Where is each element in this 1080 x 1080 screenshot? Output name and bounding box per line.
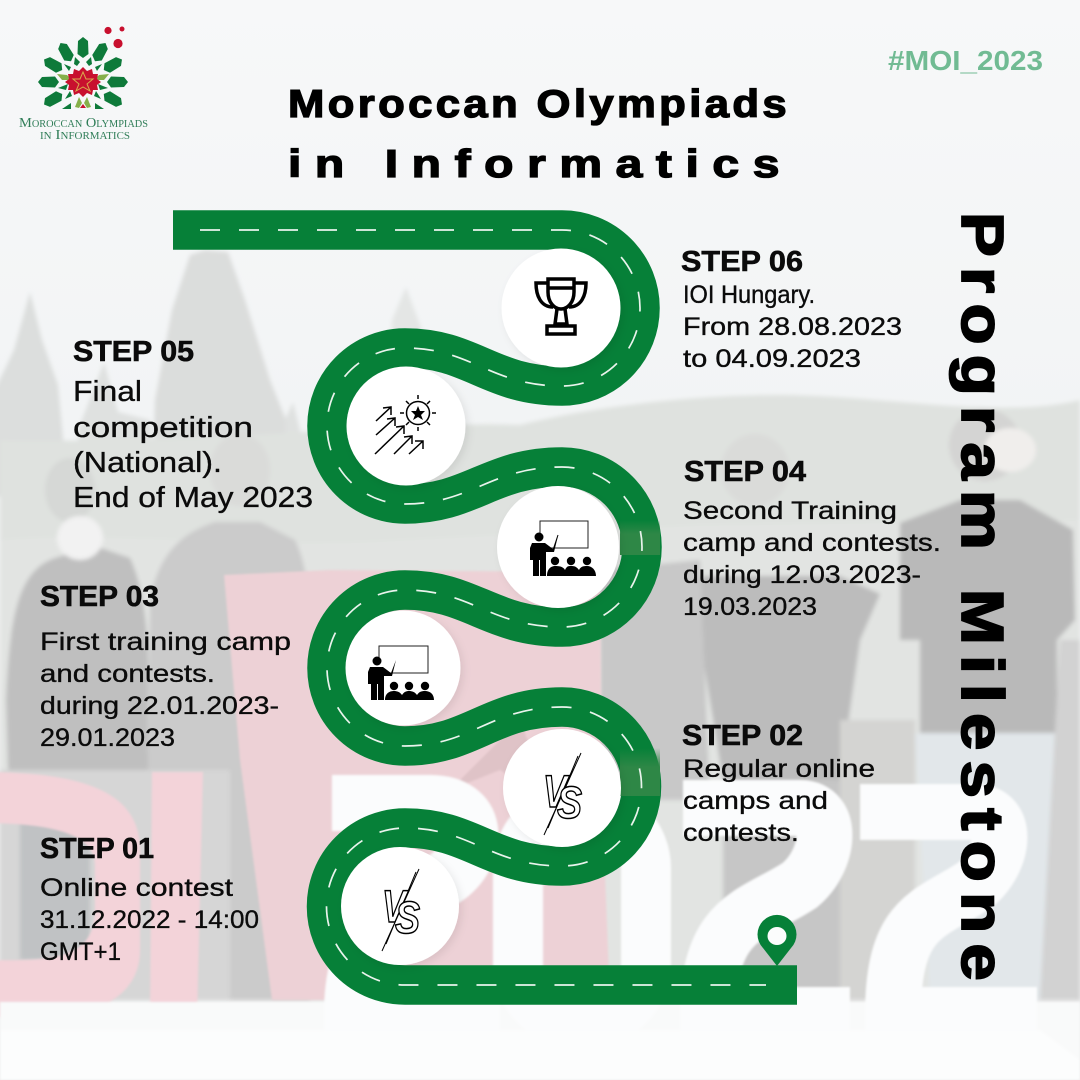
road centre dashes: [200, 230, 766, 985]
step 01 text: 31.12.2022 - 14:00: [40, 906, 259, 934]
vertical heading: Program Milestone: Program Milestone: [949, 212, 1015, 991]
step 05 text: STEP 05: [73, 336, 194, 368]
icon circle: versus (step 01): V: [382, 881, 409, 932]
icon circle: trainer and class (step 04): [497, 486, 619, 608]
step 01 text: Online contest: [40, 874, 233, 902]
step 06 text: to 04.09.2023: [683, 345, 861, 373]
icon circle: rising arrows and star: [346, 366, 466, 486]
icon circle: versus (step 02): S: [557, 777, 582, 828]
step 06 text: From 28.08.2023: [683, 313, 902, 341]
step 02 text: STEP 02: [682, 720, 803, 752]
icon circle: versus (step 02): [503, 729, 621, 847]
title: in Informatics: [288, 143, 793, 186]
title: Moroccan Olympiads: [288, 83, 790, 126]
step 05 text: competition: [73, 412, 253, 444]
step 01 text: STEP 01: [40, 833, 154, 865]
step 03 text: 29.01.2023: [40, 724, 175, 752]
step 04 text: camp and contests.: [683, 529, 941, 557]
step 04 text: 19.03.2023: [683, 593, 817, 621]
step 06 text: IOI Hungary.: [683, 281, 815, 309]
step 04 text: [683, 456, 941, 621]
step 01 text: GMT+1: [40, 938, 121, 966]
step 04 text: Second Training: [683, 497, 897, 525]
step 06 text: [681, 246, 902, 373]
logo: red dots: [104, 26, 124, 48]
location pin: [758, 915, 796, 966]
step 05 text: [73, 336, 313, 514]
step 03 text: STEP 03: [40, 581, 159, 613]
step 05 text: (National).: [73, 447, 222, 479]
step 01 text: [40, 833, 259, 966]
logo: wordmark: [19, 116, 148, 143]
hashtag: #MOI_2023: [888, 45, 1043, 76]
title: [288, 83, 793, 186]
step 03 text: First training camp: [40, 628, 291, 656]
logo: green rosette: [38, 37, 128, 109]
step 04 text: STEP 04: [684, 456, 806, 488]
icon circle: trainer and class (step 03): [346, 610, 460, 726]
step 03 text: [40, 581, 291, 752]
road surface: [173, 230, 797, 985]
icon circle: versus (step 02): V: [543, 766, 570, 817]
logo: red star: [65, 67, 101, 108]
step 02 text: Regular online: [683, 755, 875, 783]
step 05 text: Final: [73, 376, 142, 408]
step 02 text: [682, 720, 875, 847]
winding road: [173, 230, 797, 985]
step 02 text: camps and: [683, 787, 828, 815]
icon circle: trophy: [502, 248, 620, 368]
icon circle: versus (step 01): S: [395, 892, 420, 943]
logo: wordmark: in Informatics: [40, 128, 130, 143]
step 03 text: and contests.: [40, 660, 215, 688]
icon circle: versus (step 01): [341, 847, 459, 965]
step 06 text: STEP 06: [681, 246, 803, 278]
step 03 text: during 22.01.2023-: [40, 692, 279, 720]
step 04 text: during 12.03.2023-: [683, 561, 921, 589]
step 05 text: End of May 2023: [73, 482, 313, 514]
step 02 text: contests.: [683, 819, 799, 847]
logo: [19, 26, 148, 143]
logo: wordmark: Moroccan Olympiads: [19, 116, 148, 131]
